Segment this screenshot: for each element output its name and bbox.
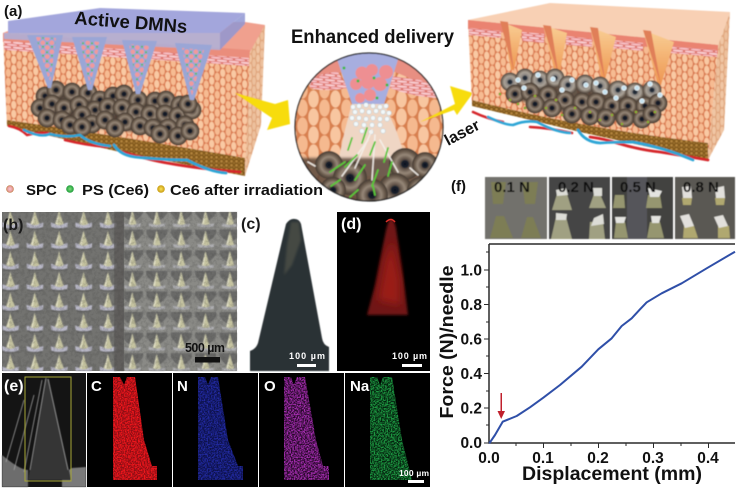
label b: (b)	[3, 217, 23, 234]
right block side	[708, 12, 730, 160]
arrow: yellow arrow into inset	[235, 93, 290, 130]
epidermis flat cells	[4, 41, 249, 66]
inset flat cells left	[310, 72, 348, 90]
microneedle 2	[72, 37, 107, 90]
needle array left	[2, 212, 124, 371]
photo background right	[124, 212, 237, 371]
label: 0.2 N	[558, 179, 594, 196]
C label: C	[91, 378, 102, 395]
O needle	[284, 377, 329, 480]
red core glow	[378, 240, 400, 305]
Na scale label: 100 µm	[399, 468, 429, 478]
C needle	[113, 377, 157, 480]
legend	[6, 182, 323, 199]
flat cells 1	[469, 28, 501, 38]
photo grain	[2, 212, 237, 371]
epidermis pink band	[3, 33, 250, 62]
microneedle 3	[122, 40, 157, 94]
C background	[87, 373, 172, 487]
black background	[337, 212, 430, 371]
flat cells 4	[612, 40, 643, 51]
photo background	[612, 177, 673, 239]
right block front cells	[468, 20, 718, 160]
inset needle tip	[335, 53, 400, 104]
y tick labels: 0.0	[460, 435, 482, 452]
arrow: yellow arrow out of inset	[420, 86, 473, 122]
panel: (e) O map	[259, 373, 344, 487]
Na background	[345, 373, 430, 487]
x tick labels: 0.0	[478, 450, 500, 467]
y axis title: Force (N)/needle	[437, 266, 457, 418]
O label: O	[264, 378, 276, 395]
SEM bright edges	[6, 378, 68, 472]
DMN base plate	[4, 8, 245, 50]
SEM base left	[2, 455, 28, 487]
inset circle border	[295, 53, 443, 201]
C speckle	[113, 377, 157, 480]
panel: (e) Na map	[345, 373, 430, 487]
flat cells 5	[670, 46, 717, 57]
needle tip highlights	[284, 222, 301, 275]
N speckle	[198, 377, 243, 480]
SEM base right	[62, 467, 86, 487]
inset flat cells right	[390, 76, 436, 98]
inset epidermis	[314, 59, 428, 84]
label c: (c)	[241, 216, 261, 233]
blood vessels	[9, 126, 240, 173]
scale bar c	[297, 364, 316, 367]
white tips	[615, 188, 662, 223]
released white particles	[516, 73, 662, 103]
dermis band right	[472, 100, 708, 160]
x tick labels	[478, 450, 719, 467]
N background	[173, 373, 258, 487]
panel: (e) SEM image	[2, 373, 86, 487]
Na label: Na	[350, 378, 370, 395]
red needle	[367, 219, 408, 315]
label: laser: laser	[442, 117, 483, 150]
blood vessels right	[473, 112, 708, 160]
inset green drug streaks	[330, 128, 392, 197]
panel: (a) left skin block with active DMNs	[3, 8, 265, 176]
yellow selection box	[25, 377, 71, 481]
chart frame	[489, 244, 735, 443]
flat cells 3	[566, 36, 592, 47]
axis ticks	[484, 252, 708, 448]
activated Ce6 dots	[499, 93, 656, 125]
heading: Enhanced delivery: Enhanced delivery	[291, 27, 454, 48]
white tips	[680, 186, 728, 228]
N label: N	[177, 378, 188, 395]
tumor cluster	[30, 80, 202, 146]
needle array right	[124, 212, 237, 371]
right block pink layer	[468, 20, 718, 54]
legend dot: PS	[66, 185, 74, 193]
label: panel f: (f)	[451, 178, 466, 195]
panel: (c) single needle micrograph	[241, 216, 329, 371]
needles	[551, 194, 606, 239]
dark vertical bands	[114, 212, 124, 371]
x axis title: Displacement (mm)	[522, 463, 702, 485]
scale bar d	[402, 364, 422, 367]
x tick labels: 0.3	[642, 450, 664, 467]
right block top	[468, 3, 730, 45]
SEM needle body	[28, 379, 71, 480]
skin block top face	[3, 22, 265, 52]
needles	[682, 198, 730, 238]
Na speckle	[370, 377, 412, 480]
needles	[613, 195, 664, 238]
label d: (d)	[341, 216, 361, 233]
x tick labels: 0.1	[532, 450, 554, 467]
skin block front cells	[3, 35, 250, 176]
inset background cells	[294, 72, 444, 200]
needles	[490, 182, 541, 238]
Na needle	[370, 377, 412, 480]
photo background	[549, 177, 610, 239]
panel: (f) 0.1 N photo	[485, 177, 547, 239]
chart: force vs displacement	[437, 244, 735, 485]
Na scale bar	[408, 480, 424, 483]
legend dot: Ce6 after irradiation	[157, 185, 165, 193]
microneedle 1	[27, 35, 63, 88]
inset fan of released drug	[339, 104, 402, 176]
O speckle	[284, 377, 329, 480]
legend text: PS: PS (Ce6)	[82, 182, 149, 199]
x tick labels: 0.4	[697, 450, 719, 467]
legend text: Ce6 after irradiation: Ce6 after irradiation	[170, 182, 323, 199]
label e: (e)	[4, 378, 24, 395]
legend dot: SPC	[6, 185, 14, 193]
title: Active DMNs: Active DMNs	[74, 7, 188, 37]
panel: (f) 0.5 N photo	[612, 177, 673, 239]
scale label c: 100 µm	[289, 351, 325, 361]
panel: (a) right skin block after irradiation	[468, 3, 730, 160]
panel: (e) N map	[173, 373, 258, 487]
x tick labels: 0.2	[587, 450, 609, 467]
inset white particle cloud	[350, 103, 391, 134]
label: 0.8 N	[683, 179, 719, 196]
cavities in skin	[500, 21, 674, 85]
label: 0.1 N	[494, 179, 530, 196]
y tick labels: 0.2	[460, 400, 482, 418]
y tick labels: 0.4	[460, 366, 482, 383]
dermis band	[7, 120, 245, 176]
irradiated tumor backing	[508, 78, 658, 120]
SEM background	[2, 373, 86, 487]
O background	[259, 373, 344, 487]
photo background	[485, 177, 547, 239]
label: panel a: (a)	[4, 3, 22, 20]
y tick labels: 1.0	[460, 262, 482, 280]
scale bar	[195, 357, 220, 362]
skin block right side	[245, 25, 265, 176]
data curve	[489, 252, 735, 443]
flat cells 2	[522, 32, 544, 43]
inset white drug streaks	[308, 130, 418, 180]
panel: (f) 0.2 N photo	[549, 177, 610, 239]
central lighter band	[627, 177, 647, 239]
label: 0.5 N	[620, 179, 656, 196]
panel: (b) microneedle array photo	[2, 212, 237, 371]
legend text: SPC: SPC	[26, 182, 57, 199]
scale label: 500 µm	[185, 341, 225, 355]
panel: (f) 0.8 N photo	[675, 177, 735, 239]
microneedle 4	[175, 43, 212, 100]
panel: (d) fluorescence micrograph	[337, 212, 430, 371]
photo background left	[2, 212, 124, 371]
red tip	[386, 220, 395, 222]
irradiated tumor cluster	[500, 68, 668, 128]
inset tumor cells	[314, 148, 436, 201]
panel: inset magnified circle	[295, 53, 445, 211]
N needle	[198, 377, 243, 480]
y tick labels: 0.6	[460, 332, 482, 348]
needle silhouette	[250, 219, 329, 371]
inset tumor backing	[302, 156, 436, 200]
photo background	[675, 177, 735, 239]
y tick labels: 0.8	[460, 297, 482, 314]
white tips	[556, 188, 604, 226]
y tick labels	[460, 262, 482, 452]
tumor backing shadow	[45, 92, 190, 134]
red arrow marker	[498, 393, 505, 419]
scale label d: 100 µm	[392, 351, 427, 361]
panel: (e) C map	[87, 373, 172, 487]
